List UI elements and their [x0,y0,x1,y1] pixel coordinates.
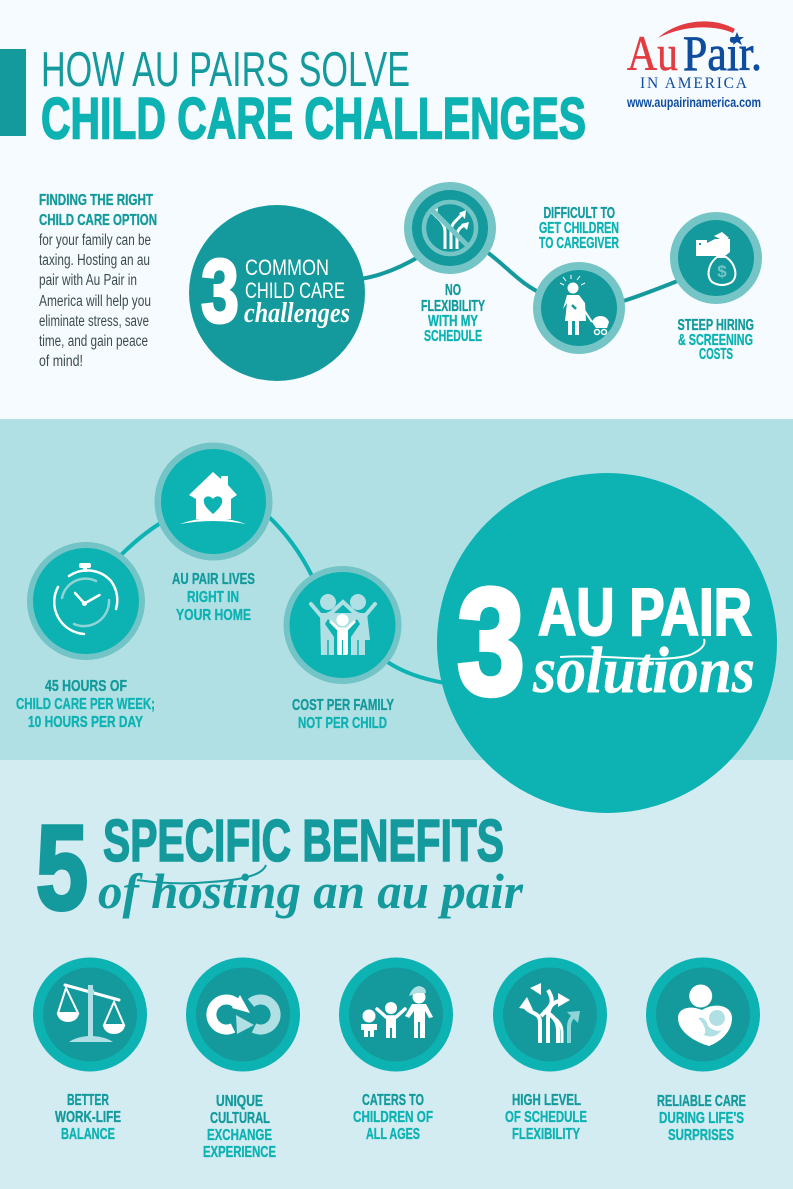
circle: 3 common child care challenges [189,205,365,381]
heading: 5 specific benefits [36,801,524,935]
icon: house with heart [154,442,272,560]
label: no flexibility: NO [445,282,461,299]
logo: Au Pair in America: IN AMERICA [640,75,748,92]
label: unique cultural exchange experience: CULTURAL [210,1110,270,1127]
title [41,43,586,152]
label: reliable care during life's surprises: SURPRISES [668,1127,734,1144]
label: better work-life balance: WORK-LIFE [55,1109,121,1126]
label: steep hiring and screening costs: COSTS [699,346,733,363]
label: steep hiring and screening costs: STEEP HIRING [678,317,754,334]
label: no flexibility: FLEXIBILITY [421,298,485,315]
heading: 5 specific benefits: 5 [36,801,88,935]
label: cost per family: COST PER FAMILY [292,697,394,714]
label: au pair lives in home [172,571,255,624]
intro text block: CHILD CARE OPTION [39,212,157,229]
title: HOW AU PAIRS SOLVE [41,43,410,97]
intro text block: FINDING THE RIGHT [39,192,153,209]
icon: hand with money bag [670,212,762,304]
circle: 3 au pair solutions [437,473,777,813]
label: high level of schedule flexibility: FLEXIBILITY [512,1126,580,1143]
icon: mother with stroller [533,262,625,354]
intro text block [39,192,157,370]
circle: 3 common child care challenges: COMMON [245,255,329,280]
icon: family [284,566,402,684]
icon: schedule flexibility arrows [493,958,607,1072]
label: high level of schedule flexibility [505,1092,587,1143]
icon: no flexibility [404,182,496,274]
label: better work-life balance: BALANCE [61,1126,115,1143]
label: 45 hours [16,678,155,731]
label: difficult to get children to caregiver: TO CAREGIVER [539,235,619,252]
label: difficult to get children to caregiver: GET CHILDREN [539,220,619,237]
label: steep hiring and screening costs [678,317,754,363]
circle: 3 au pair solutions: solutions [532,634,755,707]
label: unique cultural exchange experience: UNIQUE [216,1093,263,1110]
circle: 3 common child care challenges: challenges [244,297,350,329]
label: no flexibility: WITH MY [428,313,478,330]
logo: Au Pair in America: Pair. [683,25,762,81]
label: cost per family: NOT PER CHILD [298,715,387,732]
circle: 3 au pair solutions: 3 [457,557,525,727]
label: 45 hours: CHILD CARE PER WEEK; [16,696,155,713]
intro text block: of mind! [39,353,83,370]
label: no flexibility [421,282,485,345]
intro text block: taxing. Hosting an au [39,252,150,269]
label: caters to children of all ages: CHILDREN OF [353,1109,433,1126]
label: 45 hours: 10 HOURS PER DAY [28,714,143,731]
icon: caregiver with baby [646,958,760,1072]
intro text block: time, and gain peace [39,333,148,350]
label: caters to children of all ages: CATERS TO [362,1092,424,1109]
label: difficult to get children to caregiver [539,205,619,252]
label: no flexibility: SCHEDULE [424,328,482,345]
label: au pair lives in home: YOUR HOME [176,607,251,624]
label: better work-life balance [55,1092,121,1143]
icon: stopwatch [27,542,145,660]
icon: balance scale [33,958,147,1072]
connector: solutions path [120,516,445,683]
label: unique cultural exchange experience: EXCHANGE [207,1127,272,1144]
heading: 5 specific benefits: SPECIFIC BENEFITS [103,808,504,874]
label: unique cultural exchange experience [203,1093,276,1161]
connector: challenges path [360,250,680,302]
label: high level of schedule flexibility: OF SCHEDULE [505,1109,587,1126]
label: better work-life balance: BETTER [67,1092,109,1109]
logo: Au Pair in America: Au [627,25,678,81]
label: reliable care during life's surprises: DURING LIFE'S [659,1110,744,1127]
label: reliable care during life's surprises: RELIABLE CARE [657,1093,746,1110]
label: high level of schedule flexibility: HIGH LEVEL [512,1092,581,1109]
label: caters to children of all ages [353,1092,433,1143]
icon: hand with money bag: $ [717,262,727,281]
label: unique cultural exchange experience: EXPERIENCE [203,1144,276,1161]
circle: 3 common child care challenges: CHILD CARE [245,278,345,303]
label: difficult to get children to caregiver: DIFFICULT TO [544,205,615,222]
title: CHILD CARE CHALLENGES [41,86,586,152]
label: caters to children of all ages: ALL AGES [366,1126,420,1143]
intro text block: pair with Au Pair in [39,272,137,289]
circle: 3 common child care challenges: 3 [201,242,239,342]
label: 45 hours: 45 HOURS OF [45,678,127,695]
label: steep hiring and screening costs: & SCREENING [678,332,753,349]
label: au pair lives in home: AU PAIR LIVES [172,571,255,588]
label: reliable care during life's surprises [657,1093,746,1144]
intro text block: eliminate stress, save [39,313,149,330]
logo: Au Pair in America [626,21,762,110]
intro text block: for your family can be [39,232,151,249]
icon: children of all ages [339,958,453,1072]
intro text block: America will help you [39,293,151,310]
label: au pair lives in home: RIGHT IN [187,589,239,606]
icon: cultural exchange arrows [186,958,300,1072]
label: cost per family [292,697,394,732]
title accent bar [0,49,26,136]
heading: 5 specific benefits: of hosting an au pair [98,863,524,919]
